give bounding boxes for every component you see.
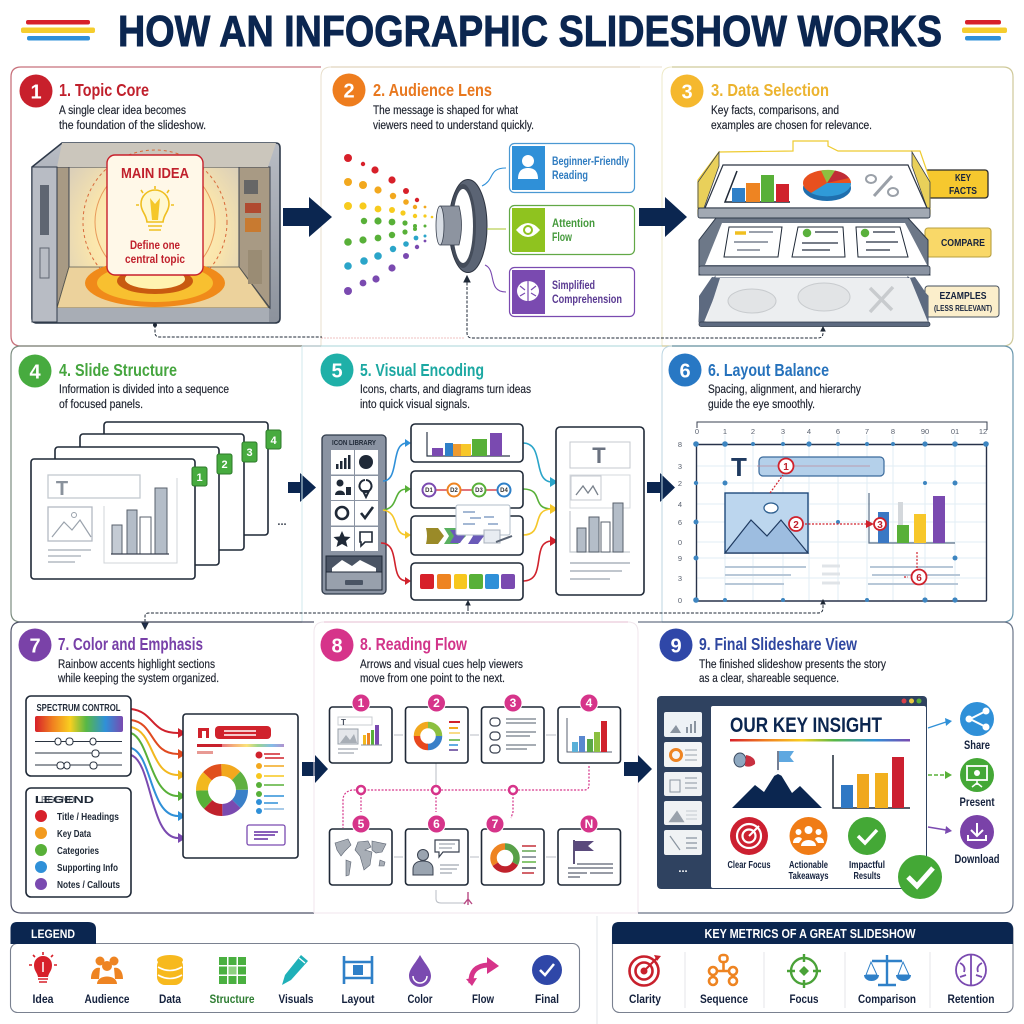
decorative stripes left — [21, 20, 95, 40]
heading 2: 2. Audience Lens — [373, 80, 492, 100]
layout grid diagram: 6 — [916, 573, 922, 584]
legend tab: LEGEND — [31, 927, 75, 941]
tray 2: compare — [699, 218, 930, 275]
icon: flow — [466, 957, 499, 1006]
percent glyph — [866, 175, 898, 196]
badge number 3: 3 — [681, 82, 693, 104]
step card 3 — [482, 707, 544, 763]
slide content: T — [56, 478, 68, 500]
heading 7: 7. Color and Emphasis — [58, 634, 203, 654]
connectors lens to cards — [482, 168, 506, 292]
label: compare — [925, 228, 991, 257]
image block — [725, 493, 808, 553]
icon: flow: Flow — [472, 994, 494, 1006]
colour legend box: LEGEND — [35, 795, 75, 806]
connectors to visuals — [381, 443, 552, 581]
step badge 6 — [668, 354, 702, 386]
tag 1 — [192, 467, 207, 486]
layout grid diagram — [678, 422, 989, 605]
main idea label: MAIN IDEA — [121, 165, 189, 182]
metric: focus — [787, 954, 821, 1006]
layout grid diagram: 2 — [793, 520, 799, 531]
decorative stripes right — [962, 20, 1007, 40]
takeaway: impactful: Impactful — [849, 860, 885, 871]
icon: audience — [84, 956, 130, 1006]
icon: structure: Structure — [210, 994, 254, 1006]
visual: node sequence: D3 — [475, 488, 483, 494]
heading 1: 1. Topic Core — [59, 80, 149, 100]
headline block: T — [731, 452, 747, 482]
card: attention flow — [510, 206, 634, 254]
takeaway: actionable — [788, 817, 829, 882]
arrow 8 to 9 — [624, 755, 652, 783]
pin labels: 6 — [433, 817, 440, 831]
tag 4 — [266, 430, 281, 449]
icon: audience: Audience — [84, 994, 130, 1006]
step card 4 — [558, 707, 620, 763]
step card 7 — [482, 829, 544, 885]
lens — [436, 180, 487, 272]
core caption: central topic — [125, 254, 186, 266]
ruler labels top: 3 — [781, 427, 785, 436]
card label: Attention — [552, 216, 595, 230]
icon: color — [408, 955, 433, 1006]
icon: eye — [516, 223, 540, 237]
tag 4: 4 — [270, 435, 277, 447]
badge number 7: 7 — [29, 636, 41, 658]
description 2: The message is shaped for what — [373, 103, 519, 117]
card: simplified comprehension — [510, 268, 634, 316]
icon: idea — [29, 952, 57, 1006]
icon: color: Color — [408, 994, 433, 1006]
icon library cabinet: ICON LIBRARY — [332, 438, 376, 447]
metric: sequence: Sequence — [700, 994, 748, 1006]
headline block — [731, 452, 884, 482]
description 5: into quick visual signals. — [360, 397, 470, 411]
heading 5: 5. Visual Encoding — [360, 360, 484, 380]
card label: Beginner-Friendly — [552, 154, 629, 168]
label: examples: EZAMPLES — [940, 291, 987, 302]
description 7: while keeping the system organized. — [57, 671, 219, 685]
visual: chevrons with popup — [411, 505, 523, 555]
thumbnail rail — [664, 712, 702, 875]
step card N — [558, 829, 620, 885]
pin labels — [358, 696, 593, 831]
arrow 2 to 3 — [639, 197, 687, 237]
ruler labels left — [678, 440, 682, 605]
label: key facts — [925, 170, 988, 198]
card label: Flow — [552, 230, 572, 244]
visual: node sequence: D2 — [450, 488, 458, 494]
arrow 1 to 2 — [283, 197, 332, 237]
colour legend box: LEGEND — [35, 795, 94, 806]
panel: 4 slide structure — [11, 346, 302, 622]
description 9: The finished slideshow presents the story — [699, 657, 887, 671]
core caption: Define one — [130, 240, 180, 252]
visual: colour swatches — [411, 563, 523, 600]
pin labels: 4 — [586, 696, 593, 710]
rainbow dot cone — [344, 154, 433, 295]
tray 3: examples — [699, 277, 930, 326]
icon: final: Final — [535, 994, 559, 1006]
visual: node sequence: D4 — [500, 488, 508, 494]
action: present — [960, 758, 995, 809]
description 2: viewers need to understand quickly. — [373, 118, 534, 132]
ruler labels top: 6 — [836, 427, 840, 436]
ruler labels top: 1 — [723, 427, 727, 436]
output document — [556, 427, 644, 595]
connector: panel 4 to 6 dashed line — [142, 600, 825, 629]
step badge 3 — [670, 74, 704, 108]
metric: retention: Retention — [948, 994, 994, 1006]
key metrics — [612, 922, 1013, 1012]
layout grid diagram: 3 — [877, 520, 883, 531]
metrics header: KEY METRICS OF A GREAT SLIDESHOW — [704, 927, 916, 941]
ruler labels left: 2 — [678, 479, 682, 488]
badge number 5: 5 — [331, 360, 343, 382]
metric: clarity — [629, 955, 662, 1006]
tag 3 — [242, 442, 257, 462]
pin labels: 1 — [358, 696, 365, 710]
continuation dots: ... — [277, 516, 287, 528]
section divider — [596, 916, 598, 1024]
small up arrow — [466, 601, 470, 611]
ruler labels top — [695, 427, 987, 436]
heading 9: 9. Final Slideshare View — [699, 634, 857, 654]
ruler labels left: 0 — [678, 538, 682, 547]
takeaway: impactful — [848, 817, 886, 882]
label: examples — [925, 286, 999, 317]
takeaway: clear focus — [728, 817, 771, 871]
big check badge — [898, 855, 942, 899]
icon: structure — [210, 957, 254, 1006]
badge number 1: 1 — [30, 82, 42, 104]
icon: data: Data — [159, 994, 182, 1006]
action: download: Download — [954, 854, 1000, 866]
ruler labels top: 4 — [807, 427, 811, 436]
arrow 4 to 5 — [288, 473, 316, 502]
connector: panel 1 to 3 dashed line — [154, 276, 825, 338]
step badge 8 — [320, 628, 354, 662]
step badge 9 — [660, 628, 692, 662]
card label: Reading — [552, 168, 588, 182]
colour legend box — [26, 788, 131, 897]
ruler labels left: 6 — [678, 518, 682, 527]
icon: data — [157, 955, 183, 1006]
description 4: Information is divided into a sequence — [59, 382, 229, 396]
icon: brain — [517, 281, 539, 301]
ruler labels top: 8 — [891, 427, 895, 436]
icon: reader — [518, 155, 538, 179]
pin labels: 2 — [433, 696, 440, 710]
step card 1 — [330, 707, 392, 763]
panel: 5 visual encoding — [302, 346, 662, 622]
badge number 4: 4 — [29, 362, 41, 384]
ruler labels left: 8 — [678, 440, 682, 449]
heading 6: 6. Layout Balance — [708, 360, 829, 380]
ruler labels left: 3 — [678, 574, 682, 583]
icon: visuals: Visuals — [278, 994, 314, 1006]
step badge 4 — [18, 354, 52, 388]
rainbow rule — [730, 739, 910, 742]
ruler labels top: 90 — [921, 427, 929, 436]
mountain with flag — [732, 751, 822, 808]
bar chart block — [869, 493, 955, 543]
icon: layout: Layout — [342, 994, 375, 1006]
colour legend box: Categories — [57, 845, 99, 857]
legend tab — [10, 922, 96, 944]
takeaway: actionable: Actionable — [789, 860, 828, 871]
label: compare: COMPARE — [941, 238, 985, 249]
label: key facts: KEY — [955, 173, 971, 184]
action: share: Share — [964, 740, 990, 752]
action: share — [960, 702, 994, 752]
pin labels: N — [585, 817, 593, 831]
colour legend box: Key Data — [57, 828, 91, 840]
step badge 2 — [332, 74, 366, 106]
result bar chart — [833, 755, 910, 808]
heading 8: 8. Reading Flow — [360, 634, 467, 654]
description 6: Spacing, alignment, and hierarchy — [708, 382, 862, 396]
number pins — [352, 694, 598, 833]
badge number 8: 8 — [331, 636, 343, 658]
colour legend box: Supporting Info — [57, 862, 118, 874]
ruler labels left: 3 — [678, 462, 682, 471]
ruler labels left: 9 — [678, 554, 682, 563]
heading 4: 4. Slide Structure — [59, 360, 177, 380]
takeaway: impactful: Results — [854, 871, 881, 882]
app window — [657, 696, 927, 889]
metrics header — [612, 922, 1013, 944]
description 1: A single clear idea becomes — [59, 103, 186, 117]
output document: T — [592, 443, 606, 468]
icon: idea: Idea — [32, 994, 54, 1006]
spectrum control: SPECTRUM CONTROL — [36, 702, 121, 714]
card label: Simplified — [552, 278, 595, 292]
arrow 5 to 6 — [647, 473, 675, 502]
ruler labels top: 0 — [695, 427, 699, 436]
arrow 7 to 8 — [302, 755, 328, 783]
step badge 1 — [20, 74, 52, 108]
icon library cabinet — [322, 435, 386, 594]
colour legend box: Notes / Callouts — [57, 879, 120, 891]
step card 2 — [406, 707, 468, 763]
visual: node sequence: D1 — [425, 488, 433, 494]
badge number 9: 9 — [670, 636, 682, 658]
pin labels: 5 — [358, 817, 365, 831]
tag 2 — [217, 454, 232, 474]
step badge 7 — [18, 628, 52, 662]
description 5: Icons, charts, and diagrams turn ideas — [360, 382, 531, 396]
red callouts — [770, 475, 917, 577]
ruler labels left: 0 — [678, 596, 682, 605]
description 7: Rainbow accents highlight sections — [58, 657, 215, 671]
output arrows — [928, 718, 952, 834]
legend — [10, 922, 580, 1012]
heading 3: 3. Data Selection — [711, 80, 829, 100]
icon: light bulb — [136, 186, 174, 230]
icon: visuals — [278, 955, 314, 1006]
takeaway: actionable: Takeaways — [788, 871, 829, 882]
spectrum control — [26, 696, 131, 776]
description 8: Arrows and visual cues help viewers — [360, 657, 523, 671]
visual: bar chart — [411, 424, 523, 462]
panel: 3 data selection — [662, 67, 1013, 346]
thumbnail rail: ... — [678, 863, 688, 875]
text lines — [725, 566, 960, 584]
ruler labels left: 4 — [678, 500, 682, 509]
tag 1: 1 — [196, 472, 203, 484]
metric: comparison — [858, 955, 916, 1006]
output page with donut — [183, 714, 298, 858]
step card 1: T — [341, 718, 346, 727]
slide content — [48, 475, 177, 563]
icon: final — [532, 955, 562, 1006]
takeaway: clear focus: Clear Focus — [728, 860, 771, 871]
tray 1: key facts — [698, 141, 930, 218]
description 6: guide the eye smoothly. — [708, 397, 815, 411]
description 9: as a clear, shareable sequence. — [699, 671, 839, 685]
tag 3: 3 — [246, 447, 253, 459]
illustration: open box with glowing core — [32, 143, 280, 323]
panel: 1 topic core — [11, 67, 321, 346]
metric: focus: Focus — [790, 994, 818, 1006]
layout grid diagram: 1 — [783, 462, 789, 473]
pin labels: 3 — [510, 696, 517, 710]
metric: clarity: Clarity — [629, 994, 662, 1006]
metric: retention — [948, 954, 994, 1006]
badge number 6: 6 — [679, 360, 691, 382]
rainbow connectors — [131, 709, 178, 838]
step card 5 — [330, 829, 392, 885]
ruler labels top: 7 — [865, 427, 869, 436]
panel: 7 color and emphasis — [11, 622, 314, 913]
description 8: move from one point to the next. — [360, 671, 505, 685]
ruler labels top: 01 — [951, 427, 959, 436]
action: present: Present — [960, 797, 995, 809]
pin labels: 7 — [492, 817, 499, 831]
action: download — [954, 815, 1000, 866]
panel: 6 layout balance — [662, 346, 1013, 622]
label: key facts: FACTS — [949, 186, 977, 197]
panel: 8 reading flow — [314, 622, 638, 913]
card label: Comprehension — [552, 292, 622, 306]
flow connectors — [343, 766, 589, 828]
tag 2: 2 — [221, 459, 228, 471]
slide headline: OUR KEY INSIGHT — [730, 714, 882, 737]
description 1: the foundation of the slideshow. — [59, 118, 206, 132]
icon: layout — [342, 956, 375, 1006]
description 4: of focused panels. — [59, 397, 143, 411]
metric: comparison: Comparison — [858, 994, 916, 1006]
panel: 9 final slideshare view — [638, 622, 1013, 913]
step card 6 — [406, 829, 468, 885]
slide stack — [31, 422, 287, 579]
ruler labels top: 12 — [979, 427, 987, 436]
colour legend box: Title / Headings — [57, 811, 119, 823]
description 3: Key facts, comparisons, and — [711, 103, 839, 117]
ruler labels top: 2 — [751, 427, 755, 436]
card: beginner-friendly reading — [510, 144, 634, 192]
step badge 5 — [320, 354, 354, 386]
visual: node sequence — [411, 471, 523, 508]
panel: 2 audience lens — [321, 67, 662, 346]
metric: sequence — [700, 955, 748, 1006]
description 3: examples are chosen for relevance. — [711, 118, 872, 132]
label: examples: (LESS RELEVANT) — [934, 304, 992, 313]
badge number 2: 2 — [343, 80, 355, 102]
